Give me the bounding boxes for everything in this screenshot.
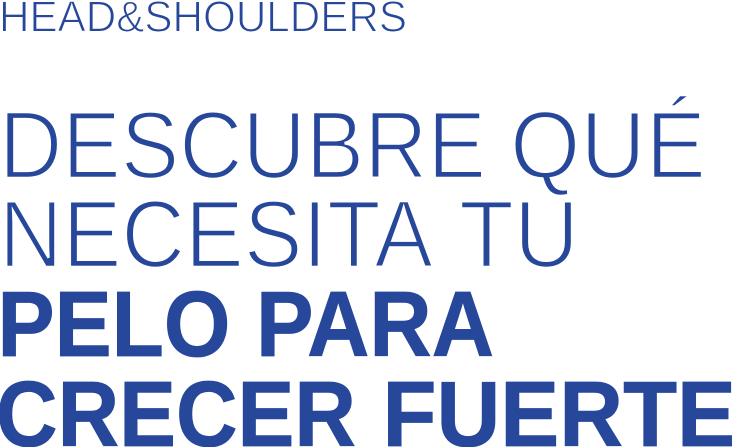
title line: pelo para (0, 272, 494, 376)
title line: descubre qué: DESCUBRE (0, 92, 486, 199)
title line: pelo para: PARA (256, 272, 494, 376)
title line: crecer fuerte (0, 362, 732, 447)
title line: necesita tu: TU (459, 181, 579, 288)
title line: descubre qué: QUÉ (510, 92, 706, 199)
title line: necesita tu: NECESITA (0, 181, 433, 288)
title line: pelo para: PELO (0, 272, 230, 376)
title block (0, 92, 732, 447)
